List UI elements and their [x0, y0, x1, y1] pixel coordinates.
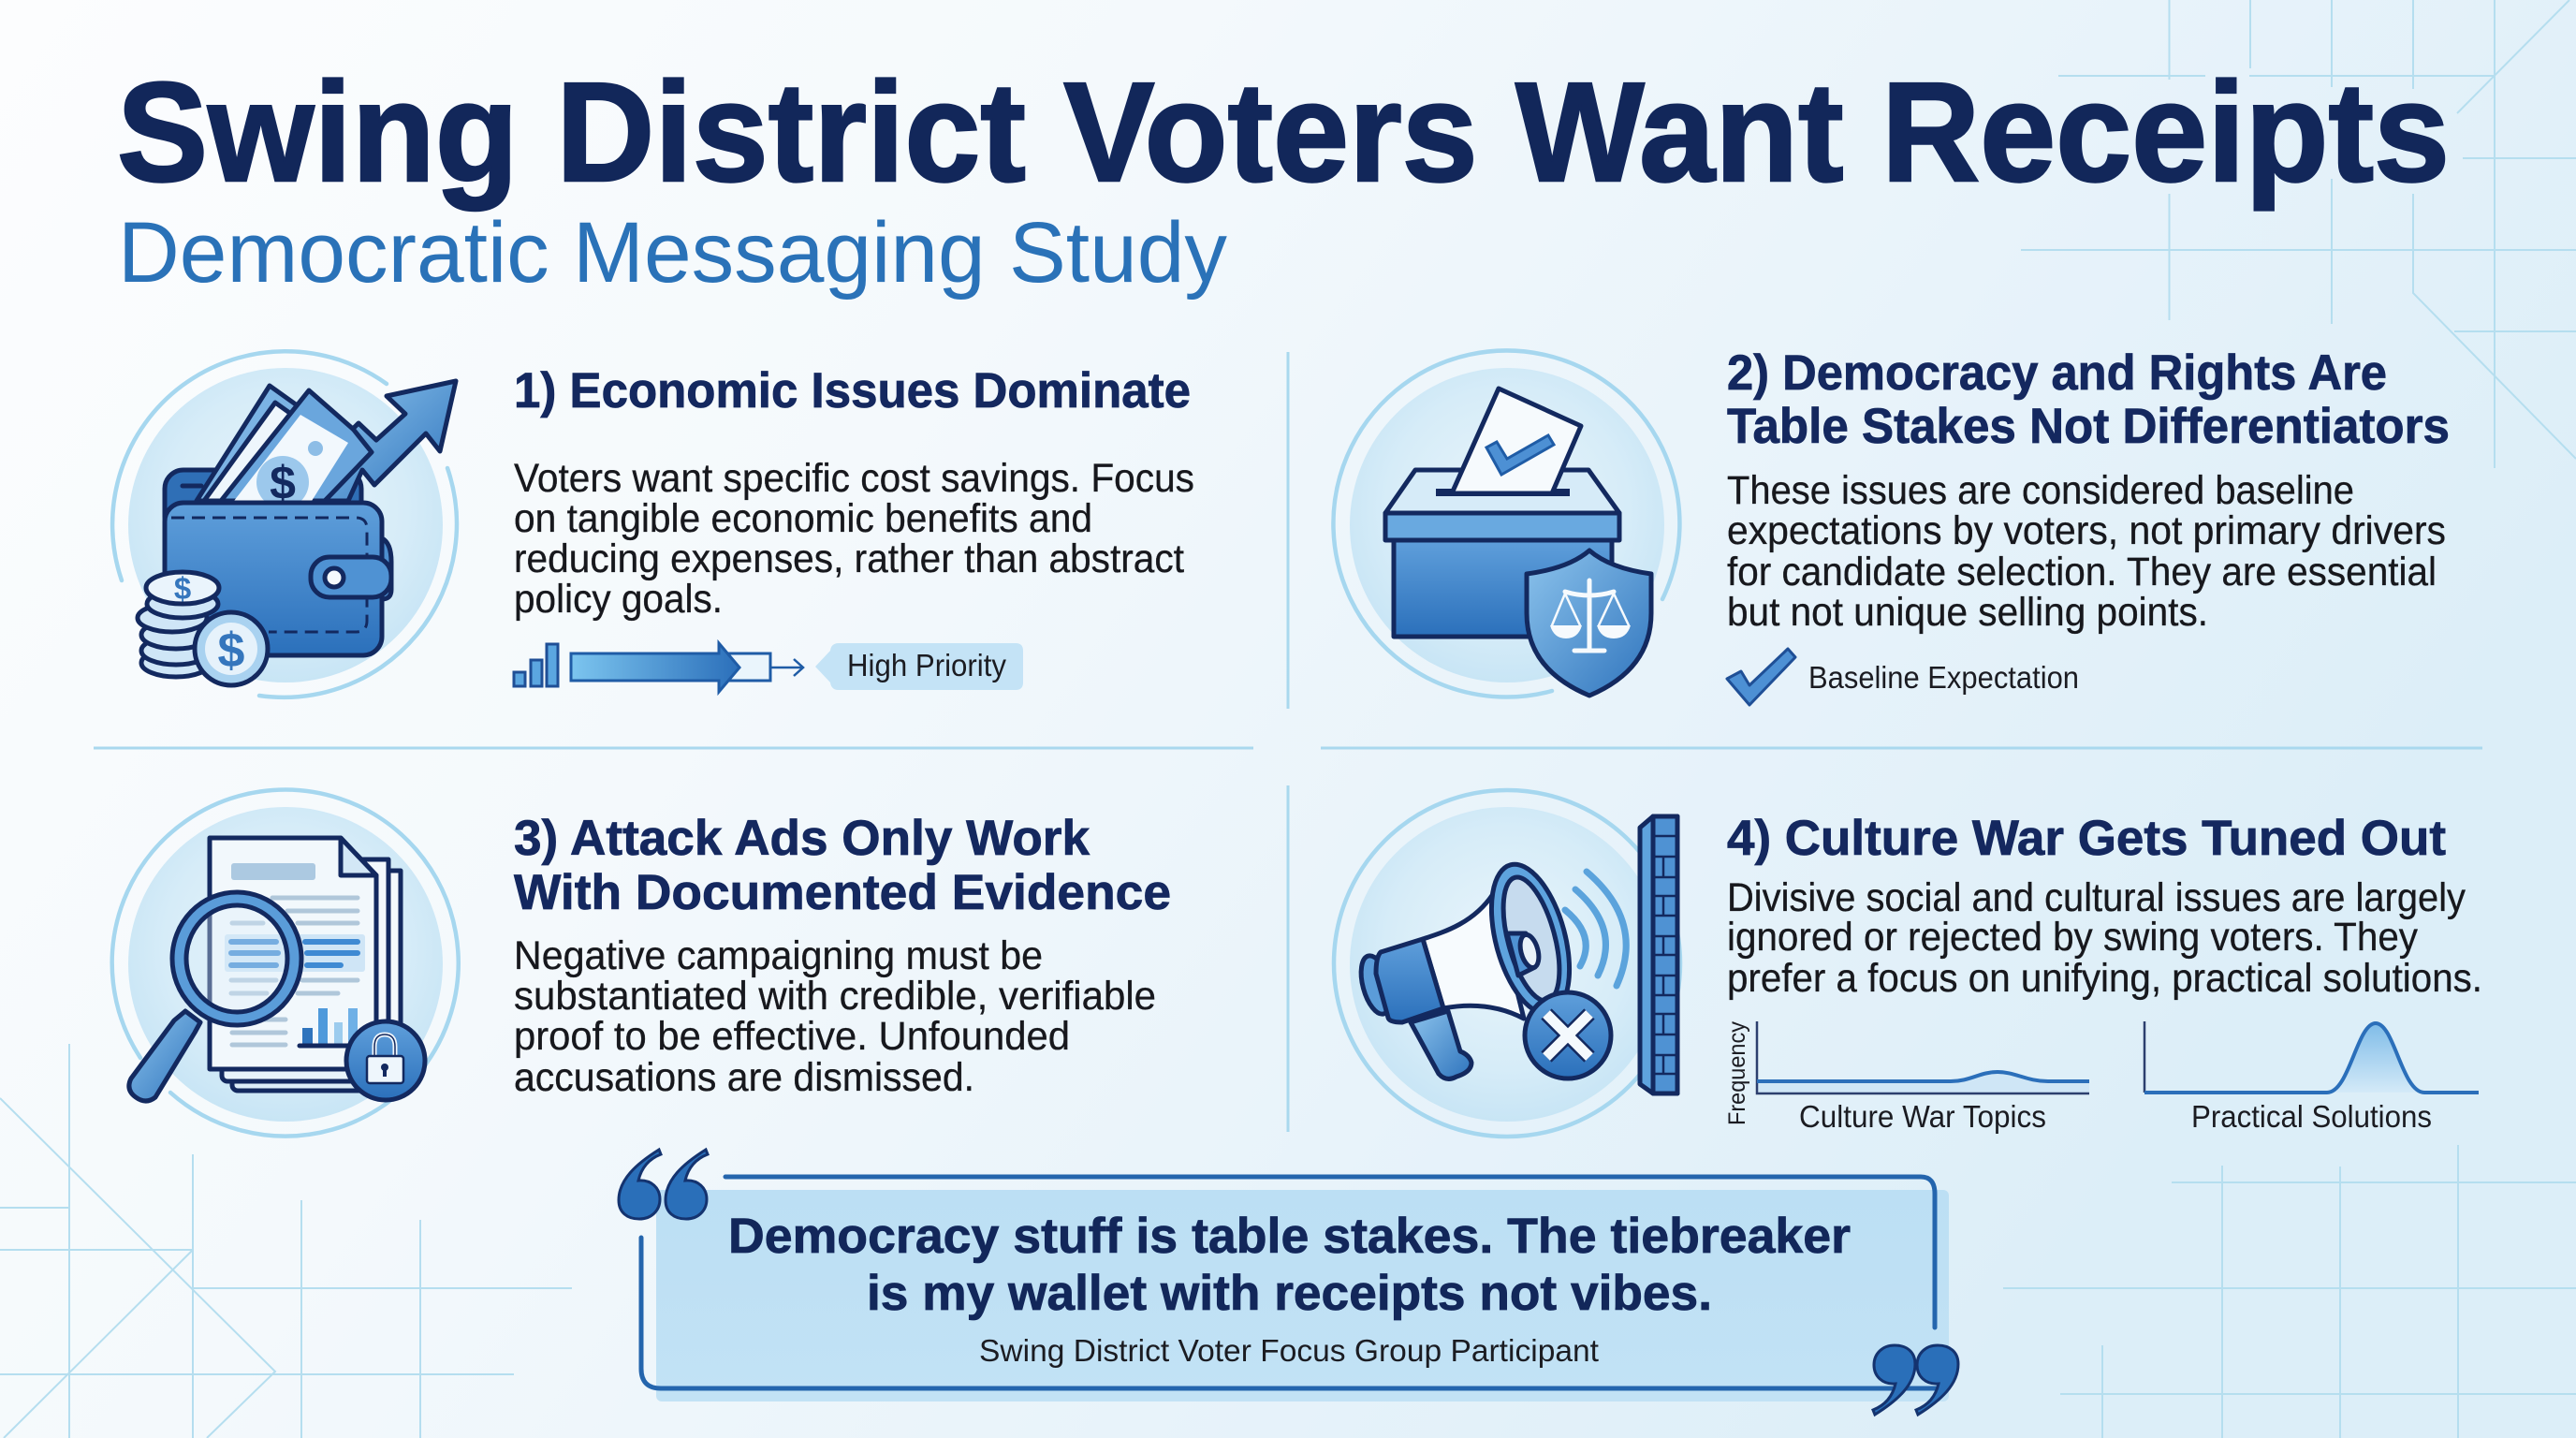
chart: culture war topics: [1724, 1021, 2089, 1134]
icon: wallet with money and rising arrow: $: [174, 571, 191, 606]
background grid bottom right: [2003, 1145, 2576, 1438]
panel: attack ads: [112, 790, 1171, 1137]
quote text: [728, 1209, 1851, 1321]
body text 3: proof to be effective. Unfounded: [514, 1015, 1070, 1059]
body text 2: for candidate selection. They are essential: [1727, 550, 2437, 594]
heading 2: 2) Democracy and Rights Are: [1727, 345, 2387, 401]
body text 3: [514, 934, 1156, 1100]
panel: democracy and rights: [1333, 345, 2450, 705]
body text 1: reducing expenses, rather than abstract: [514, 537, 1184, 581]
panel: economic issues: [112, 351, 1194, 697]
body text 4: ignored or rejected by swing voters. They: [1727, 916, 2419, 960]
chart: practical solutions: Practical Solutions: [2191, 1099, 2432, 1134]
body text 1: [514, 457, 1194, 622]
dividers: [94, 352, 2482, 1132]
high priority tag: High Priority: [847, 648, 1006, 682]
quote box fill: [656, 1190, 1949, 1401]
icon: wallet with money and rising arrow: $: [218, 624, 245, 678]
body text 1: Voters want specific cost savings. Focus: [514, 457, 1194, 501]
icon: ballot box and shield: [1333, 350, 1679, 697]
panel: culture war: [1334, 790, 2482, 1137]
background grid bottom left: [0, 1044, 572, 1438]
body text 1: on tangible economic benefits and: [514, 497, 1092, 541]
icon: megaphone hitting wall: [1334, 790, 1680, 1137]
icon: document with magnifier and lock: [112, 790, 459, 1137]
body text 3: substantiated with credible, verifiable: [514, 975, 1156, 1019]
heading 3: With Documented Evidence: [514, 865, 1171, 920]
chart: culture war topics: Frequency: [1724, 1021, 1750, 1125]
heading 3: 3) Attack Ads Only Work: [514, 811, 1090, 866]
icon: opening quote mark: [619, 1150, 708, 1219]
heading 2: [1727, 345, 2450, 454]
body text 3: Negative campaigning must be: [514, 934, 1043, 978]
body text 4: [1727, 876, 2482, 1001]
body text 2: [1727, 469, 2446, 635]
body text 4: prefer a focus on unifying, practical solutions.: [1727, 957, 2482, 1001]
quote text: Democracy stuff is table stakes. The tiebreaker: [728, 1209, 1851, 1264]
icon: wallet with money and rising arrow: $: [270, 457, 296, 509]
chart: practical solutions: [2144, 1021, 2479, 1134]
quote text: is my wallet with receipts not vibes.: [867, 1266, 1712, 1321]
heading 2: Table Stakes Not Differentiators: [1727, 399, 2450, 454]
icon: closing quote mark: [1873, 1345, 1958, 1415]
chart: culture war topics: Culture War Topics: [1799, 1099, 2046, 1134]
body text 2: expectations by voters, not primary drivers: [1727, 509, 2446, 553]
priority arrow: [571, 643, 803, 692]
body text 3: accusations are dismissed.: [514, 1056, 974, 1100]
high priority tag: [815, 643, 1023, 690]
body text 4: Divisive social and cultural issues are largely: [1727, 876, 2466, 920]
priority bars icon: [514, 644, 558, 686]
body text 2: These issues are considered baseline: [1727, 469, 2354, 513]
heading 4: 4) Culture War Gets Tuned Out: [1727, 811, 2446, 866]
quote attribution: Swing District Voter Focus Group Participant: [979, 1333, 1599, 1368]
quote callout: [619, 1150, 1958, 1415]
background grid top right: [2021, 0, 2576, 468]
baseline expectation label: Baseline Expectation: [1808, 660, 2079, 695]
body text 1: policy goals.: [514, 578, 723, 622]
icon: wallet with money and rising arrow: [112, 351, 457, 697]
subtitle: Democratic Messaging Study: [118, 205, 1227, 301]
heading 3: [514, 811, 1171, 920]
heading 1: 1) Economic Issues Dominate: [514, 363, 1191, 418]
title: Swing District Voters Want Receipts: [117, 52, 2450, 211]
body text 2: but not unique selling points.: [1727, 591, 2208, 635]
quote box border: [641, 1177, 1945, 1388]
icon: check mark: [1727, 649, 1795, 705]
